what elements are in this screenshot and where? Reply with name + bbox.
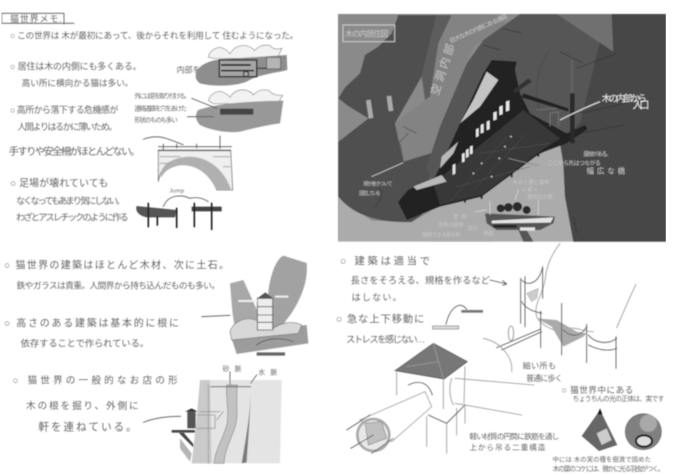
background: left tree and trunk — [338, 15, 505, 242]
note: buildings are improvised: はしない。 — [352, 292, 402, 302]
note: vertical movement: ○ 急な上下移動に — [336, 312, 424, 325]
sketch: tube-style tower structure — [347, 343, 559, 453]
annotation: bottom notes: 窓枠の素材 — [438, 222, 463, 229]
sketch: tree cross-section with interior: 内部を図 — [177, 65, 208, 75]
panel tag: setting illustration — [343, 25, 395, 42]
note: lantern light: ○ 猫世界中にある — [562, 384, 633, 395]
sketch: tree cross-section with windows: 外には窓を取り付ける。 — [134, 91, 190, 100]
note: the tree came first: ○ この世界は 木が最初にあって、後からそれを利用して 住むようになった。 — [10, 29, 298, 40]
panel tag: setting illustration: 木の内居住図 — [345, 29, 388, 39]
annotation: bottom notes: 橋面 — [483, 230, 493, 237]
callout: entrance from inside the tree: 木の内部から — [602, 93, 647, 104]
illustration: small floating platform: 居住区の橋 — [527, 193, 552, 200]
note: dwellings inside trees: ○ 居住は木の内側にも多くある。 — [10, 60, 142, 71]
note: tall buildings depend on roots — [4, 317, 179, 349]
note: lantern light — [562, 384, 665, 403]
panel: dark building illustration — [338, 12, 666, 242]
note: shops along tree roots — [13, 374, 178, 433]
sketch: rope bridge — [483, 243, 636, 383]
sketch: sand vein and water vein section: 水脈 — [258, 367, 277, 376]
sketch: jumping between platforms — [136, 189, 222, 229]
annotation: bottom notes: 窓枠 — [453, 213, 467, 220]
sketch: tree cross-section with interior — [177, 45, 287, 86]
illustration: small floating platform — [475, 179, 555, 242]
note: lantern light: ちょうちんの光の正体は、実です — [573, 394, 665, 403]
note: shops along tree roots: 軒を連ねている。 — [38, 420, 137, 433]
panel: lower-left notes — [4, 256, 308, 463]
panel: lower-right notes — [336, 243, 665, 473]
sketch: sand vein and water vein section — [143, 364, 282, 463]
annotation: lower right notes: 幅広な橋 — [587, 166, 626, 175]
sketch: building between roots — [202, 256, 308, 356]
note: buildings are improvised: 長さをそろえる、規格を作るなど — [351, 274, 491, 285]
note: broken footholds — [10, 177, 129, 223]
sketch: tree cross-section with windows — [134, 90, 283, 132]
note: broken footholds: なくなってもあまり気にしない。 — [16, 195, 125, 206]
note: dwellings inside trees — [10, 60, 142, 88]
background: right tree mass and lower sky — [427, 14, 666, 242]
illustration: small floating platform: に続く — [522, 186, 538, 193]
note: shops along tree roots: ○ 猫世界の一般的なお店の形 — [13, 374, 178, 386]
annotation: left note: 根が巻きついて — [363, 180, 393, 187]
note: lantern description: 中には 木の実の種を樹液で固めた — [553, 455, 651, 464]
annotation: left note: 固定している — [359, 191, 381, 197]
note: little fear of falling: 人間よりはるかに薄いため。 — [17, 121, 117, 132]
annotation: bottom notes: 開閉できる扉の形 — [422, 232, 461, 239]
heading: cat world memo: 猫世界メモ. — [10, 13, 62, 24]
note: buildings are improvised — [340, 254, 507, 302]
note: vertical movement: ストレスを感じない… — [346, 333, 425, 344]
note: little fear of falling: ○ 高所から落下する危機感が — [10, 104, 118, 115]
callout: entrance from inside the tree — [560, 93, 649, 120]
annotation: bottom notes — [422, 213, 493, 239]
sketch: jumping between platforms: Jump — [169, 189, 184, 195]
sketch: rope bridge: 普通に歩く — [526, 373, 563, 383]
icon: jump between ledges — [433, 305, 483, 329]
sketch: tree cross-section with windows: 形状のものも多い — [134, 115, 178, 124]
annotation: bottom notes: 窓の — [468, 225, 478, 232]
annotation: text along band: 巨大な木の内側にある通路 — [449, 12, 508, 45]
note: broken footholds: わざとアスレチックのように作る — [16, 212, 129, 223]
icon: triangular lantern — [582, 408, 617, 451]
heading: cat world memo — [2, 13, 74, 24]
sketch: tube-style tower structure: 軽い材質の円筒に鉄筋を通し — [469, 431, 559, 441]
note: buildings are improvised: ○ 建築は適当で — [340, 254, 430, 267]
sketch: arched bridge without rails — [143, 136, 233, 190]
note: dwellings inside trees: 高い所に横向かる猫は多い。 — [22, 77, 133, 88]
note: shops along tree roots: 木の根を掘り、外側に — [26, 400, 139, 412]
note: building materials: 鉄やガラスは貴重。人間界から持ち込んだものも多い。 — [17, 279, 220, 290]
annotation: left note — [359, 163, 403, 197]
annotation: lower right notes: 屋根がある。 — [583, 150, 612, 158]
sketch: tree cross-section with windows: 連絡通路を穴をあけた — [134, 104, 187, 113]
note: lantern description — [553, 455, 664, 473]
annotation: inner path along trunk: 空洞内部 — [428, 42, 457, 97]
note: vertical movement — [336, 312, 425, 344]
note: tall buildings depend on roots: ○ 高さのある建築は基本的に根に — [4, 317, 179, 330]
note: building materials: ○ 猫世界の建築はほとんど木材、次に土石。 — [4, 258, 229, 271]
annotation: lower right notes — [508, 150, 626, 175]
illustration: suspended wooden building — [398, 60, 587, 220]
icon: round lantern — [625, 414, 661, 450]
sketch: tube-style tower structure: 上から吊る二重構造 — [469, 442, 546, 452]
note: building materials — [4, 258, 229, 290]
callout: entrance from inside the tree: 入口 — [633, 100, 649, 111]
note: tall buildings depend on roots: 依存することで作られている。 — [21, 338, 149, 349]
annotation: lower right notes: ここから先はつながる — [547, 159, 601, 167]
sketch: rope bridge: 細い所も — [523, 360, 556, 370]
illustration: small floating platform: 木の上部に森林 — [513, 179, 549, 186]
sketch: sand vein and water vein section: 砂脈 — [223, 364, 242, 373]
note: little fear of falling — [10, 104, 118, 132]
note: broken footholds: ○ 足場が壊れていても — [10, 177, 108, 190]
note: no handrails: 手すりや安全柵がほとんどない。 — [9, 145, 140, 158]
panel: upper-left notes — [2, 13, 298, 229]
note: lantern description: 木の葉のコケには、微かに光る羽虫がつく。 — [553, 464, 664, 473]
